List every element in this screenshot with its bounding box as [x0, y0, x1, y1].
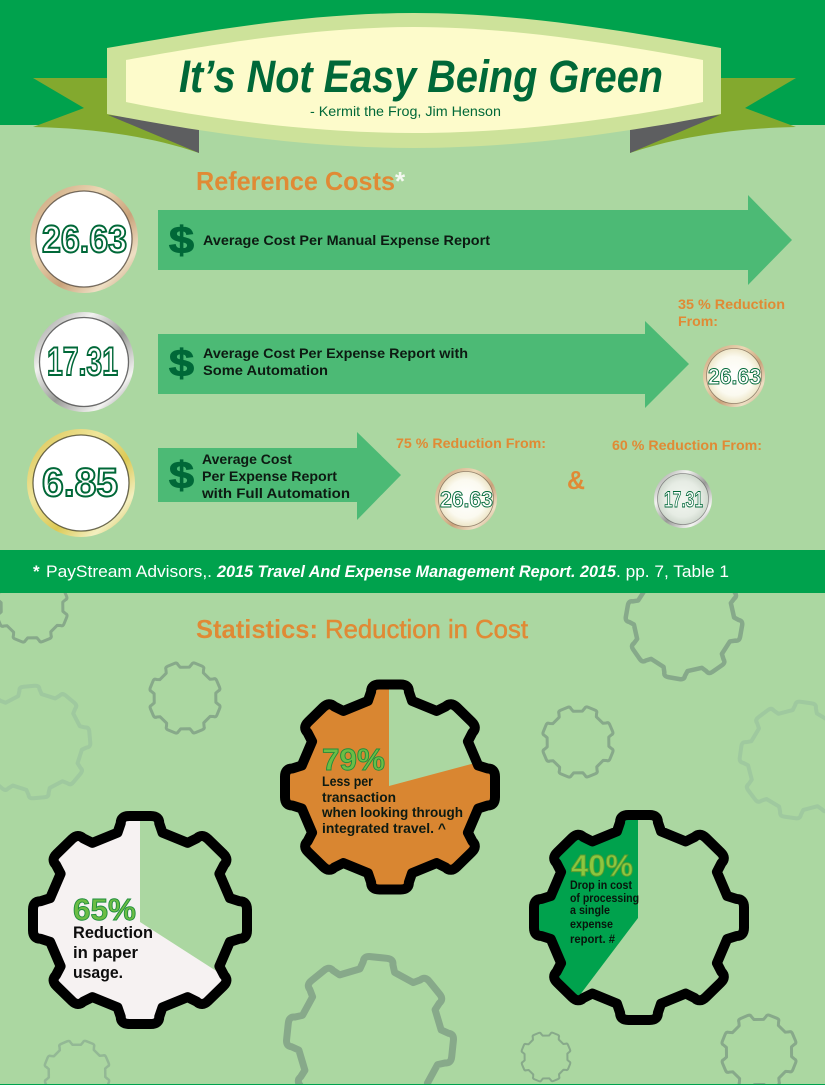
medal: 17.31 silver [34, 312, 134, 412]
heading: statistics: Reduction in Cost [325, 614, 529, 644]
medal: 6.85 gold [27, 429, 135, 537]
small medal: 26.63: 26.63 [440, 487, 493, 512]
label: Average Cost Per Manual Expense Report [203, 232, 490, 248]
bottom green line [0, 1084, 825, 1085]
reduction label: 60 percent: 60 % Reduction From: [612, 437, 762, 453]
small medal: 26.63 [703, 345, 765, 407]
gear stat: 65 percent: 65% [73, 892, 136, 927]
gear stat: 65 percent [28, 811, 252, 1029]
ampersand: & [567, 465, 585, 495]
gear stat: 79 percent: 79% [322, 742, 385, 777]
icon: dollar: $ [169, 343, 194, 385]
small medal: 17.31: 17.31 [664, 487, 703, 512]
title ribbon [33, 13, 796, 153]
gear stat: 65 percent: Reduction [73, 923, 153, 942]
ribbon tails [33, 78, 796, 153]
label: Some Automation [203, 362, 328, 378]
reduction label: 35 percent: From: [678, 313, 718, 329]
gear stat: 40 percent: of processing [570, 893, 639, 905]
gear stat: 79 percent: when looking through [321, 804, 463, 820]
label: Per Expense Report [202, 468, 337, 484]
source band: 2015 Travel And Expense Management Report. 2015 [216, 562, 617, 581]
medal: 6.85 gold: 6.85 [42, 461, 118, 505]
heading: reference costs: Reference Costs [196, 166, 395, 196]
source band: PayStream Advisors,. [46, 562, 212, 581]
reduction label: 35 percent: 35 % Reduction [678, 296, 785, 312]
label: with Full Automation [201, 485, 350, 501]
gear stat: 40 percent: expense [570, 919, 613, 931]
arrow [158, 321, 689, 408]
title: It’s Not Easy Being Green [179, 51, 663, 102]
gear stat: 79 percent: Less per [322, 773, 373, 789]
label [201, 451, 350, 501]
reduction label: 75 percent: 75 % Reduction From: [396, 435, 546, 451]
small medal: 26.63 [435, 468, 497, 530]
medal: 17.31 silver: 17.31 [47, 340, 118, 384]
heading: reference costs: * [395, 166, 406, 196]
row 1: manual report [30, 185, 792, 293]
banner inner [126, 27, 703, 133]
medal: 26.63 bronze: 26.63 [42, 219, 127, 261]
row 2: some automation [34, 296, 785, 412]
banner outer [107, 13, 721, 148]
icon: dollar: $ [169, 455, 194, 497]
heading: statistics: Statistics: [196, 614, 318, 644]
top green band [0, 0, 825, 125]
small medal: 17.31 [654, 470, 712, 528]
reduction label: 35 percent [678, 296, 785, 329]
heading: statistics [196, 614, 529, 644]
gear stat: 65 percent: usage. [73, 963, 123, 982]
gear stat: 40 percent [520, 800, 744, 1020]
medal: 26.63 bronze [30, 185, 138, 293]
label: Average Cost Per Expense Report with [203, 345, 468, 361]
gear stat: 40 percent: a single [570, 905, 610, 917]
source band: * [33, 562, 40, 581]
gear stat: 79 percent: transaction [322, 789, 396, 805]
icon: dollar: $ [169, 220, 194, 262]
gear stat: 40 percent: Drop in cost [570, 880, 632, 892]
gear stat: 40 percent: 40% [571, 848, 633, 883]
row 3: full automation [27, 429, 762, 537]
gear stat: 79 percent [280, 680, 500, 894]
source band [0, 550, 825, 593]
background gears [0, 554, 825, 1085]
source band: . pp. 7, Table 1 [616, 562, 729, 581]
gear stat: 65 percent: in paper [73, 943, 138, 962]
gear stat: 40 percent: report. # [570, 934, 616, 946]
label: Average Cost [202, 451, 292, 467]
arrow [158, 432, 401, 520]
arrow [158, 195, 792, 285]
gear stat: 79 percent: integrated travel. ^ [322, 820, 446, 836]
small medal: 26.63: 26.63 [708, 364, 761, 389]
subtitle: - Kermit the Frog, Jim Henson [310, 103, 501, 119]
label [203, 345, 468, 378]
